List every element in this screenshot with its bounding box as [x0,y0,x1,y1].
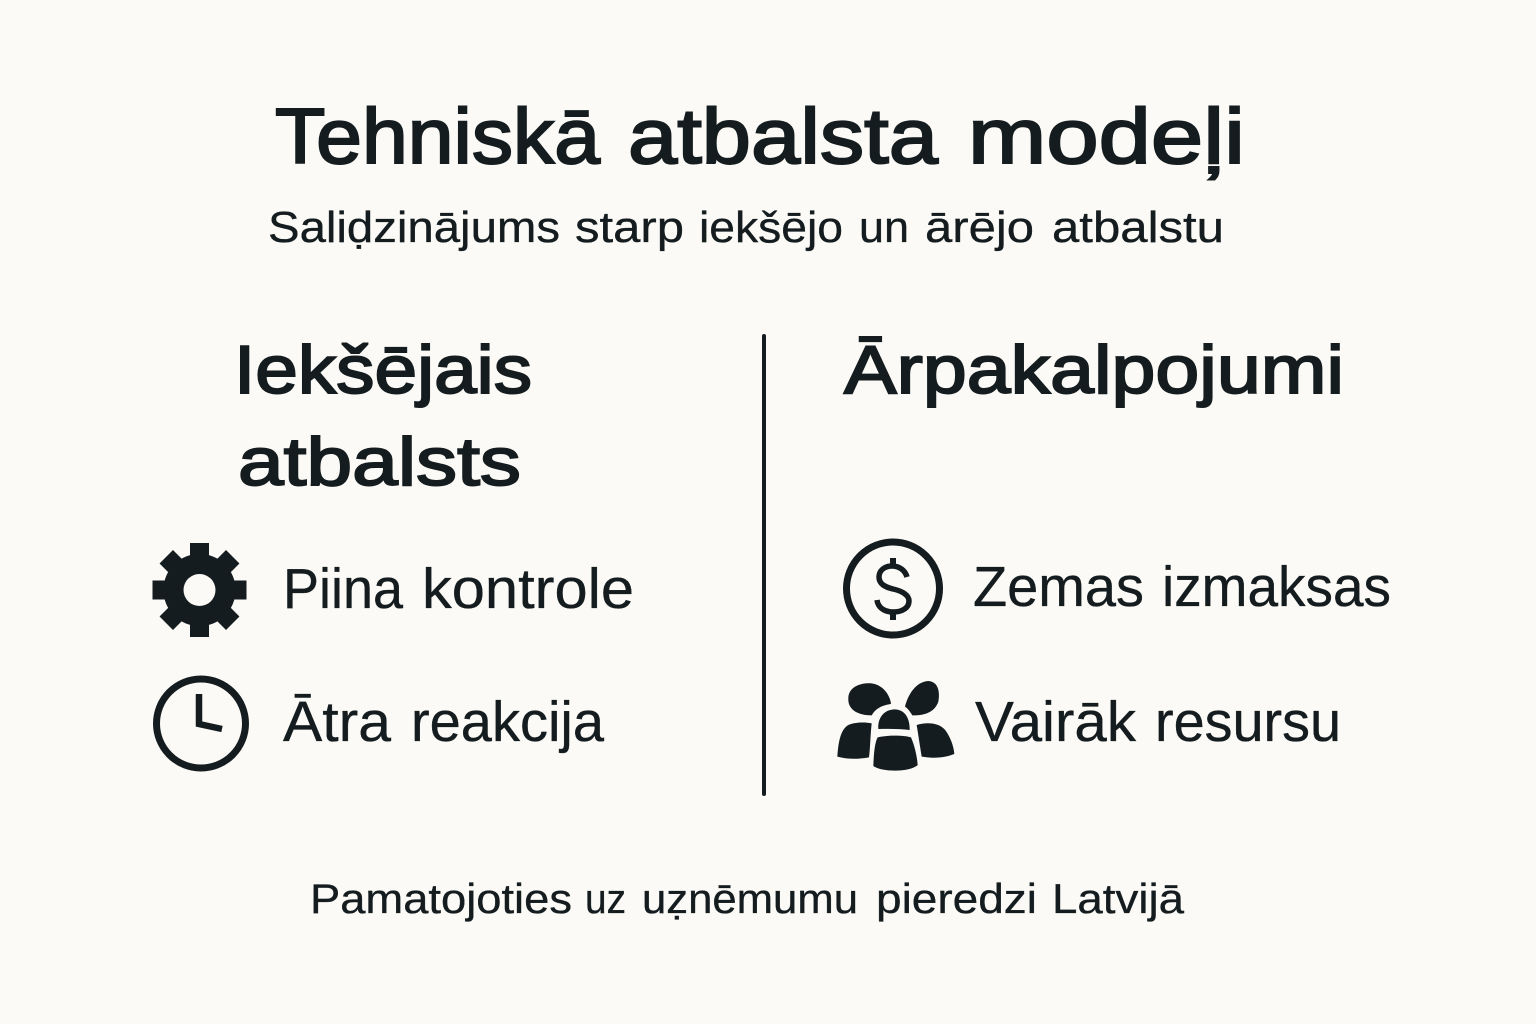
footer note: Latvijā [1052,875,1185,922]
label: more resources: resursu [1155,690,1341,754]
title: atbalsta [628,92,939,180]
panel: outsourced services [837,332,1391,771]
label: more resources: Vairāk [975,690,1137,754]
label: full control: Piina [283,557,403,621]
subtitle: Saliḍzinājums [268,203,560,252]
footer note: uẓnēmumu [642,875,858,922]
subtitle: atbalstu [1052,203,1224,252]
icon: dollar coin [846,542,940,635]
heading: internal support: Iekšējais [234,332,532,408]
subtitle: ārējo [925,203,1034,252]
label: low cost: izmaksas [1162,555,1391,619]
label: low cost: Zemas [973,555,1144,619]
footer note: uz [585,875,626,922]
label: fast reaction: reakcija [411,690,604,754]
title: modeļi [968,92,1245,180]
panel: internal support [152,332,634,768]
subtitle: starp [575,203,684,252]
title: Tehniskā [275,92,601,180]
footer note: pieredzi [876,875,1037,922]
icon: group of people [837,681,954,771]
subtitle: iekšējo [699,203,843,252]
label: full control: kontrole [422,557,634,621]
heading: internal support [234,332,532,500]
icon: clock [156,679,246,768]
footer note: Pamatojoties [310,875,572,922]
icon: gear [152,543,246,637]
subtitle: un [859,203,909,252]
divider [762,334,766,796]
heading: outsourcing: Ārpakalpojumi [844,332,1344,408]
label: fast reaction: Ātra [283,690,391,754]
heading: internal support: atbalsts [238,424,521,500]
